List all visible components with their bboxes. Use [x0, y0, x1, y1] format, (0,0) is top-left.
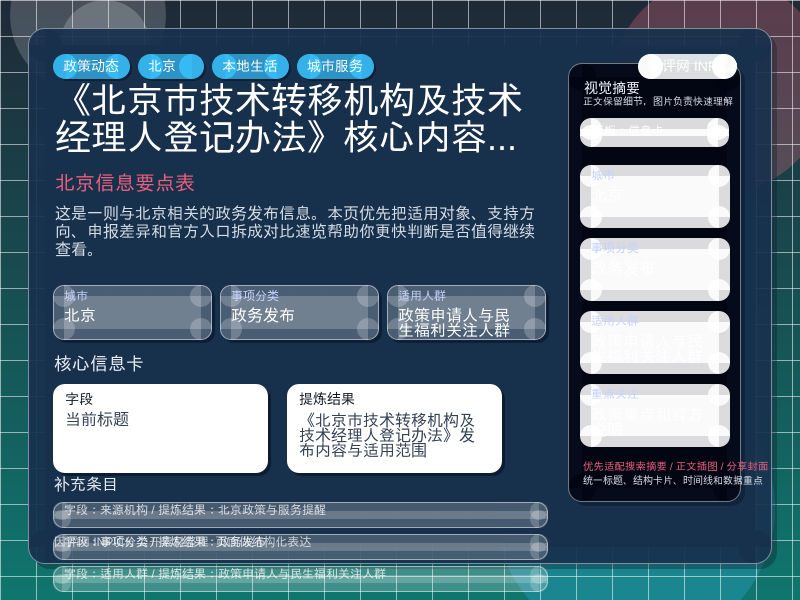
fact card: 城市: 北京 [64, 308, 96, 325]
tag: 政策动态: 政策动态 [63, 58, 119, 74]
intro paragraph: 这是一则与北京相关的政务发布信息。本页优先把适用对象、支持方 向、申报差异和官方入口拆成对比速览帮助你更快判断是否值得继续 查看。 [55, 206, 535, 259]
title: 《北京市技术转移机构及技术 经理人登记办法》核心内容... [55, 80, 523, 158]
side card: 适用人群: 政策申请人与民 生福利关注人群 [591, 334, 703, 366]
tag: 北京 [138, 54, 204, 79]
side card: 重点关注 [580, 384, 730, 447]
side footer: usage: 优先适配搜索摘要 / 正文插图 / 分享封面 [583, 461, 769, 473]
tag: 北京: 北京 [148, 58, 176, 74]
side card: 模板 [580, 118, 729, 147]
white card: 字段 [53, 384, 268, 473]
row: 适用人群 [53, 566, 548, 592]
side card: 事项分类: 政务发布 [591, 261, 655, 278]
source pill [638, 54, 737, 79]
fact card: 事项分类: 事项分类 [231, 289, 279, 303]
side card: 适用人群: 适用人群 [591, 314, 639, 328]
heading: 核心信息卡: 核心信息卡 [54, 354, 144, 374]
fact card: 城市: 城市 [64, 289, 88, 303]
subtitle: 北京信息要点表 [55, 173, 195, 195]
fact card: 城市 [53, 285, 212, 340]
fact card: 适用人群: 政策申请人与民 生福利关注人群 [398, 308, 510, 340]
white card: 字段: 字段 [65, 391, 93, 407]
row: 事项分类: 字段：事项分类 / 提炼结果：政务发布 [64, 535, 266, 549]
heading: 补充条目: 补充条目 [54, 477, 118, 494]
fact card: 事项分类 [220, 285, 379, 340]
side heading: 视觉摘要 [584, 80, 640, 96]
white card: 字段: 当前标题 [65, 412, 129, 429]
side card: 城市: 城市 [591, 168, 615, 182]
side card: 城市 [580, 165, 730, 228]
source note: 因评网 INPICK 公开素材整理 页面做结构化表达 [54, 535, 311, 549]
side card: 重点关注: 重点关注 [591, 387, 639, 401]
side footer: note: 统一标题、结构卡片、时间线和数据重点 [583, 476, 763, 487]
white card: 提炼结果: 《北京市技术转移机构及技术经理人登记办法》发布内容与适用范围 [299, 413, 475, 460]
side subheading: 正文保留细节，图片负责快速理解 [583, 97, 733, 108]
side card: 事项分类: 事项分类 [591, 241, 639, 255]
side card: 模板: 模板：信息卡 [592, 124, 664, 138]
row: 适用人群: 字段：适用人群 / 提炼结果：政策申请人与民生福利关注人群 [64, 567, 386, 581]
side card: 城市: 北京 [591, 188, 623, 205]
side card: 适用人群 [580, 311, 730, 374]
fact card: 适用人群: 适用人群 [398, 289, 446, 303]
side card: 重点关注: 政策重点和官方 说明 [591, 407, 703, 439]
row: 来源机构 [53, 502, 548, 528]
tag: 本地生活: 本地生活 [222, 58, 278, 74]
tag: 本地生活 [212, 54, 289, 79]
row: 来源机构: 字段：来源机构 / 提炼结果：北京政策与服务提醒 [64, 503, 326, 517]
row: 事项分类 [53, 534, 548, 560]
tag: 城市服务 [297, 54, 374, 79]
fact card: 适用人群 [387, 285, 546, 340]
side card: 事项分类 [580, 238, 730, 301]
tag: 城市服务: 城市服务 [307, 58, 363, 74]
fact card: 事项分类: 政务发布 [231, 308, 295, 325]
white card: 提炼结果 [287, 384, 502, 473]
tag: 政策动态 [53, 54, 130, 79]
side panel: visual summary [568, 63, 741, 502]
white card: 提炼结果: 提炼结果 [299, 391, 355, 407]
